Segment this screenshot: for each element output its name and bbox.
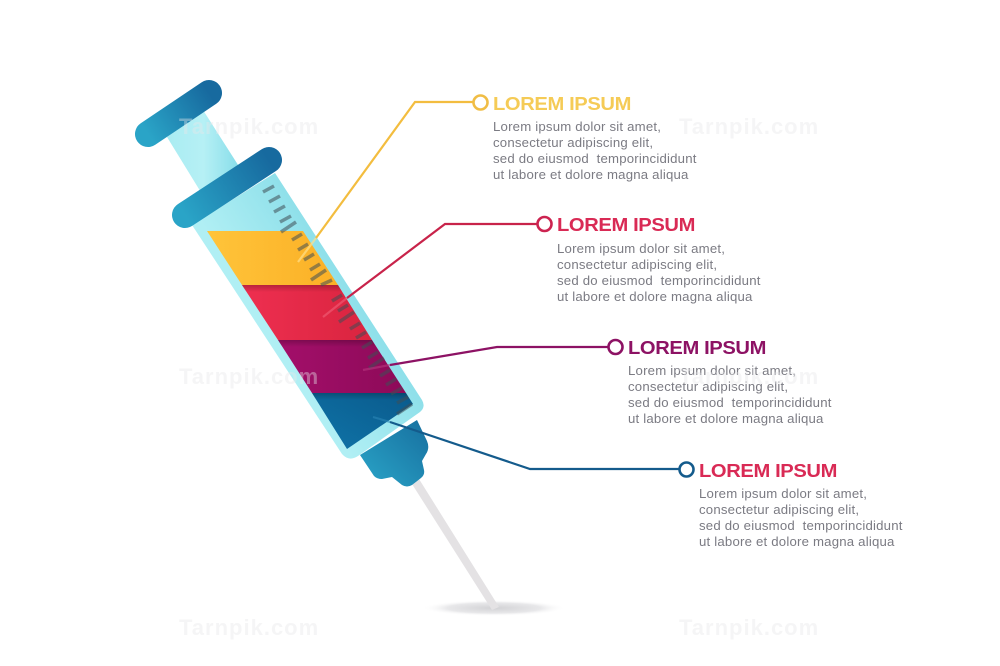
watermarks: Tarnpik.com <box>179 114 319 139</box>
liquid: yellow layer <box>207 231 338 285</box>
plunger thumb cap <box>148 93 209 134</box>
marker: yellow <box>474 96 488 110</box>
body 3: Lorem ipsum dolor sit amet, <box>628 363 796 378</box>
watermarks <box>179 114 819 640</box>
nozzle <box>360 420 428 486</box>
liquid: purple layer <box>278 340 406 393</box>
watermarks: Tarnpik.com <box>179 364 319 389</box>
body 2: sed do eiusmod temporincididunt <box>557 273 761 288</box>
watermarks: Tarnpik.com <box>679 364 819 389</box>
needle shadow <box>422 600 566 616</box>
body 4: Lorem ipsum dolor sit amet, <box>699 486 867 501</box>
text block 1 <box>493 93 697 182</box>
connector: blue <box>373 417 679 469</box>
heading 1: LOREM IPSUM <box>493 93 631 114</box>
scale ticks <box>263 186 412 414</box>
heading 4: LOREM IPSUM <box>699 460 837 481</box>
connector: yellow <box>298 102 473 262</box>
liquid: blue layer <box>312 393 413 449</box>
marker: red <box>538 217 552 231</box>
heading 2: LOREM IPSUM <box>557 214 695 235</box>
body 1: ut labore et dolore magna aliqua <box>493 167 689 182</box>
text block 2 <box>557 214 761 304</box>
watermarks: Tarnpik.com <box>679 615 819 640</box>
body 2: ut labore et dolore magna aliqua <box>557 289 753 304</box>
body 3: ut labore et dolore magna aliqua <box>628 411 824 426</box>
body 4: sed do eiusmod temporincididunt <box>699 518 903 533</box>
connector: purple <box>363 347 608 370</box>
body 1: sed do eiusmod temporincididunt <box>493 151 697 166</box>
plunger rod <box>167 110 240 194</box>
body 4: consectetur adipiscing elit, <box>699 502 859 517</box>
watermarks: Tarnpik.com <box>679 114 819 139</box>
heading 3: LOREM IPSUM <box>628 337 766 358</box>
body 3: consectetur adipiscing elit, <box>628 379 788 394</box>
marker: purple <box>608 340 622 354</box>
liquid: red layer <box>242 285 372 340</box>
connector: red <box>323 224 537 317</box>
body 1: consectetur adipiscing elit, <box>493 135 653 150</box>
barrel <box>192 173 424 459</box>
body 4: ut labore et dolore magna aliqua <box>699 534 895 549</box>
syringe <box>148 93 499 610</box>
marker: blue <box>680 462 694 476</box>
lower flange <box>185 160 269 215</box>
body 2: Lorem ipsum dolor sit amet, <box>557 241 725 256</box>
watermarks: Tarnpik.com <box>179 615 319 640</box>
body 1: Lorem ipsum dolor sit amet, <box>493 119 661 134</box>
text block 3 <box>628 337 832 426</box>
text block 4 <box>699 460 903 549</box>
body 3: sed do eiusmod temporincididunt <box>628 395 832 410</box>
body 2: consectetur adipiscing elit, <box>557 257 717 272</box>
needle <box>412 479 499 610</box>
